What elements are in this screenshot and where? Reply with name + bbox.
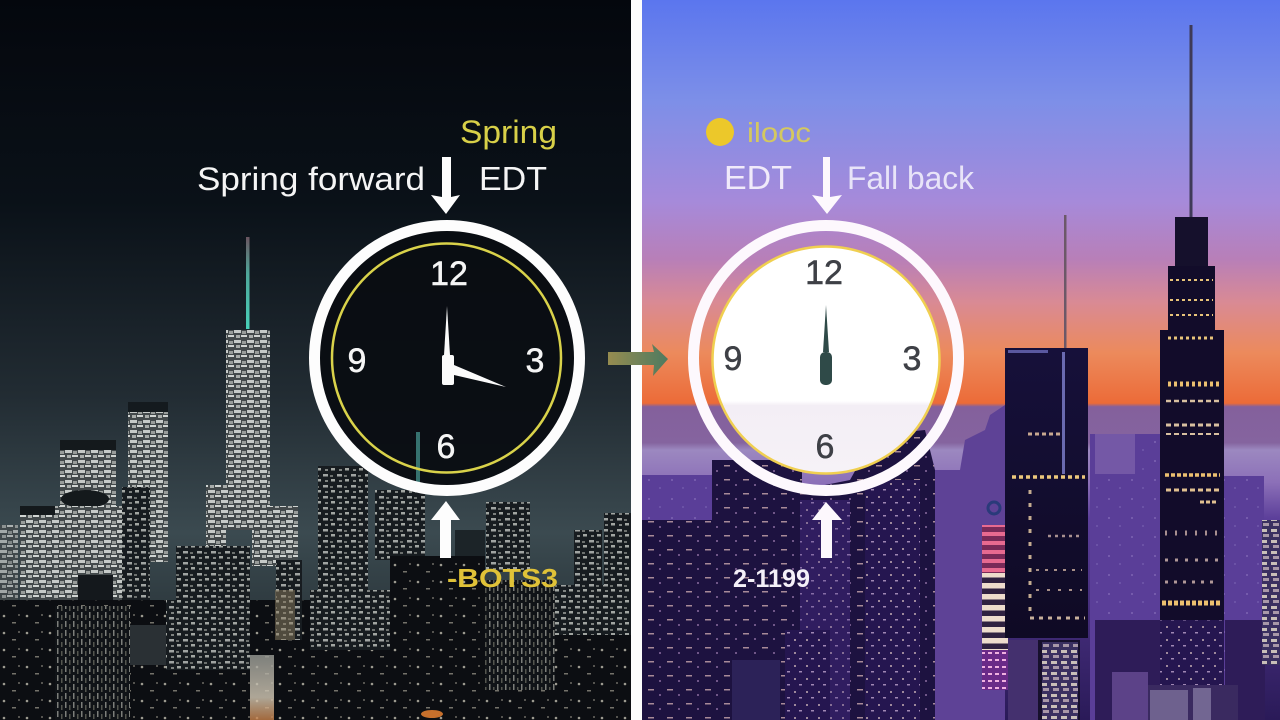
night skyline bbox=[0, 237, 631, 720]
heading: Spring: Spring bbox=[460, 114, 557, 150]
label: white date: 2-1199 bbox=[733, 565, 810, 593]
labels: fall bbox=[706, 117, 975, 593]
label: Fall back: Fall back bbox=[847, 160, 975, 196]
skyscraper with antenna bbox=[1005, 215, 1088, 720]
clock numbers bbox=[724, 254, 921, 466]
down arrow bbox=[812, 157, 842, 214]
clock: spring, night face bbox=[314, 226, 580, 490]
clock numbers: 3 bbox=[903, 340, 921, 378]
clock hand bbox=[820, 305, 832, 385]
clock numbers: 12 bbox=[430, 255, 468, 293]
clock hands bbox=[442, 306, 506, 387]
clock numbers: 6 bbox=[437, 428, 455, 466]
lit building at right edge bbox=[1262, 520, 1280, 665]
heading: noon: ilooc bbox=[747, 117, 811, 148]
icon: sun bbox=[706, 118, 734, 146]
clock numbers: 9 bbox=[724, 340, 742, 378]
labels: spring bbox=[197, 114, 558, 593]
up arrow bbox=[431, 501, 460, 558]
white clock face bbox=[712, 246, 940, 474]
clock numbers: 6 bbox=[816, 428, 834, 466]
clock numbers: 9 bbox=[348, 342, 366, 380]
dusk skyline bbox=[642, 25, 1280, 720]
label: Spring forward: Spring forward bbox=[197, 161, 425, 197]
dusk sky background bbox=[642, 0, 1280, 720]
up arrow bbox=[812, 502, 842, 558]
clock numbers bbox=[348, 255, 544, 466]
yellow inner ring bbox=[332, 244, 561, 472]
centre divider bbox=[631, 0, 642, 720]
clock face bbox=[315, 226, 579, 490]
label: EDT: EDT bbox=[724, 159, 792, 196]
clock numbers: 12 bbox=[805, 254, 843, 292]
night sky background bbox=[0, 0, 631, 720]
outer ring bbox=[694, 226, 958, 490]
arrow between clocks bbox=[608, 344, 668, 376]
down arrow bbox=[431, 157, 460, 214]
clock numbers: 3 bbox=[526, 342, 544, 380]
tall tower with spire bbox=[1148, 25, 1238, 720]
label: yellow date: -BOTS3 bbox=[447, 563, 558, 593]
neon sign tower bbox=[982, 502, 1008, 690]
faint spire through clock bbox=[416, 432, 420, 482]
outer ring bbox=[314, 226, 580, 490]
panel: dusk city (fall back) bbox=[642, 0, 1280, 720]
panel: night city (spring forward) bbox=[0, 0, 631, 720]
clock: fall back, day face bbox=[694, 226, 958, 490]
label: EDT: EDT bbox=[479, 160, 547, 197]
